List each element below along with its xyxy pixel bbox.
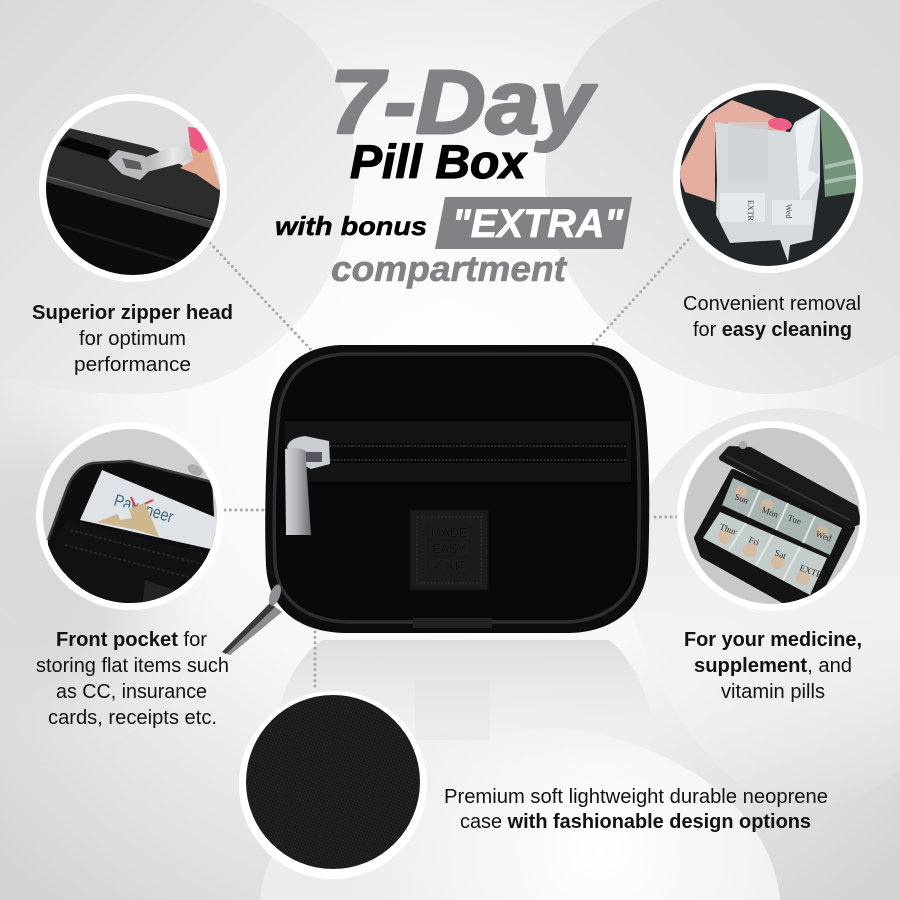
text: zipper: Superior zipper head [32, 302, 233, 324]
text: medicine: vitamin pills [721, 681, 825, 703]
text: medicine: supplement, and [694, 655, 852, 677]
text: zipper [32, 302, 233, 376]
photo: removal for cleaning: EXTR [746, 200, 755, 222]
photo: removal for cleaning: Wed [784, 204, 793, 218]
photo: zipper head [39, 94, 230, 285]
photo: open pill box: EXTR [798, 562, 824, 580]
zipper tail [222, 583, 283, 655]
photo: open pill box: Fri [747, 534, 761, 548]
photo: open pill box: Mon [760, 504, 780, 520]
text: cleaning [683, 293, 861, 341]
photo: open pill box: Thur [718, 521, 738, 537]
photo: open pill box: Sat [773, 547, 788, 561]
product reflection [276, 640, 652, 770]
photo: open pill box: Sun [733, 491, 750, 506]
text: neoprene: case with fashionable design options [460, 811, 811, 833]
title: Pill Box [350, 135, 528, 188]
text: neoprene: Premium soft lightweight durable neoprene [444, 786, 828, 808]
product: black pill case [222, 345, 649, 655]
label patch: MADE [431, 526, 467, 540]
text: front pocket: Front pocket for [56, 629, 207, 651]
zipper pull on front [285, 436, 330, 535]
text: medicine [684, 629, 862, 703]
text: front pocket [36, 629, 229, 729]
text: zipper: performance [74, 354, 191, 376]
text: cleaning: Convenient removal [683, 293, 861, 315]
title: with bonus [275, 211, 427, 241]
label patch: ✓ KIT [432, 559, 466, 573]
photo: open pill box [677, 421, 867, 611]
title [275, 53, 632, 289]
text: neoprene [444, 786, 828, 833]
bottom rim clip [413, 618, 492, 628]
text: front pocket: storing flat items such [36, 655, 229, 677]
photo: front pocket: Payoneer [112, 491, 176, 527]
text: medicine: For your medicine, [684, 629, 862, 651]
extra badge: "EXTRA" [452, 202, 624, 246]
text: front pocket: cards, receipts etc. [48, 707, 217, 729]
label patch: EASY [432, 542, 466, 556]
photo: removal for cleaning [673, 83, 865, 275]
title: compartment [331, 248, 568, 289]
text: zipper: for optimum [79, 328, 186, 350]
text: front pocket: as CC, insurance [56, 681, 207, 703]
photo: open pill box: Tue [786, 512, 803, 527]
photo: open pill box: Wed [814, 528, 833, 544]
title: 7-Day [330, 53, 597, 153]
dotted connector lines [210, 240, 688, 688]
photo: neoprene fabric [239, 691, 427, 879]
text: cleaning: for easy cleaning [693, 319, 852, 341]
label patch [410, 510, 488, 590]
photo: front pocket [36, 422, 224, 610]
